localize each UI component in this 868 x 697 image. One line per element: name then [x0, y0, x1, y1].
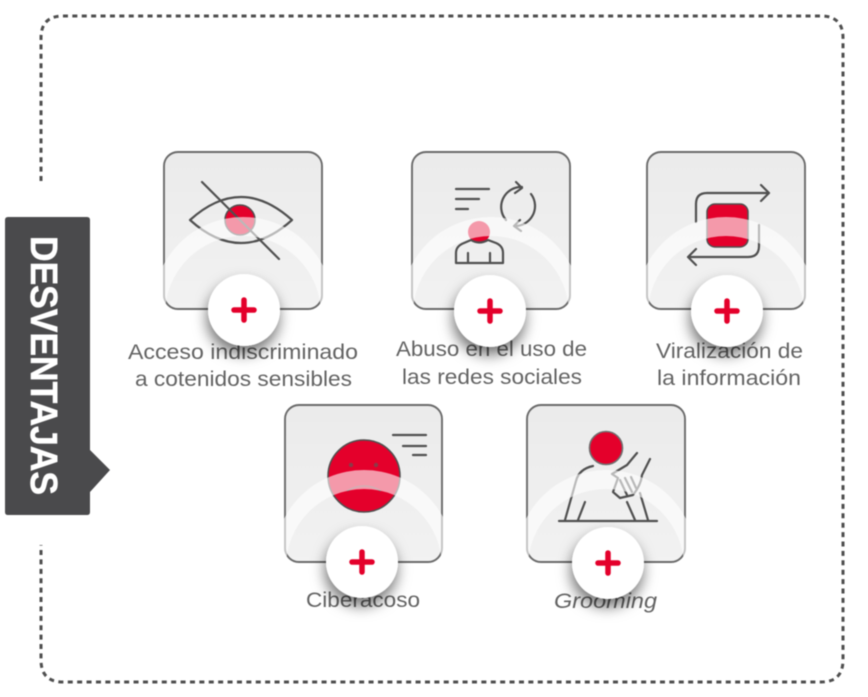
label: viralizacion: la información	[657, 366, 801, 390]
icon: person with hand on shoulder	[559, 432, 657, 521]
label: viralizacion	[656, 339, 803, 390]
icon: person, text lines and refresh arrows	[456, 182, 535, 263]
card with sad face icon	[283, 403, 444, 564]
card with share-loop icon	[645, 150, 807, 311]
plus button	[326, 526, 398, 598]
label: acceso indiscriminado	[128, 340, 358, 391]
label: viralizacion: Viralización de	[656, 339, 803, 363]
label: abuso en redes: Abuso en el uso de	[396, 337, 587, 361]
card with hand on shoulder icon	[525, 403, 687, 564]
label: acceso indiscriminado: a cotenidos sensibles	[135, 367, 352, 391]
panel: ciberacoso	[283, 403, 444, 616]
plus button	[454, 275, 526, 347]
side label: DESVENTAJAS	[5, 217, 110, 515]
label: acceso indiscriminado: Acceso indiscriminado	[128, 340, 358, 364]
card with eye icon	[162, 150, 324, 311]
card with person and refresh icon	[410, 150, 572, 311]
plus button	[208, 274, 280, 346]
panel: viralizacion de la informacion	[645, 150, 807, 386]
panel: grooming	[525, 403, 687, 616]
plus button	[691, 275, 763, 347]
label: abuso en redes	[396, 337, 587, 389]
icon: square with loop arrows	[688, 185, 769, 265]
icon: crossed-out eye	[190, 182, 292, 259]
plus button	[572, 527, 644, 599]
panel: acceso indiscriminado	[128, 152, 358, 397]
side label: DESVENTAJAS: DESVENTAJAS	[22, 236, 64, 495]
label: ciberacoso: Ciberacoso	[306, 588, 420, 612]
icon: sad face	[328, 435, 426, 512]
label: grooming: Grooming	[554, 589, 657, 613]
panel: abuso en el uso de las redes sociales	[396, 152, 587, 397]
label: abuso en redes: las redes sociales	[402, 365, 582, 389]
